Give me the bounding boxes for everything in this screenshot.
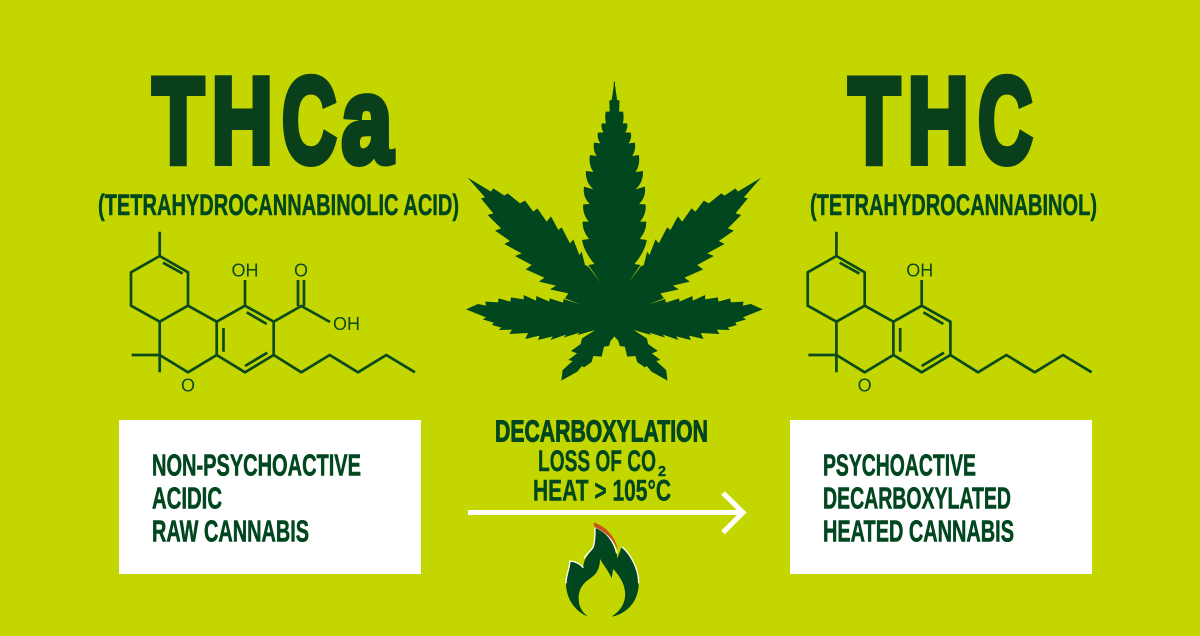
title: THCa: T xyxy=(152,52,204,188)
label: ring O: O xyxy=(181,376,195,396)
text: non-psychoactive: NON-PSYCHOACTIVE xyxy=(152,449,361,483)
text: raw cannabis: RAW CANNABIS xyxy=(152,515,309,549)
title: THCa: a xyxy=(342,52,393,188)
label: ring O: O xyxy=(858,376,872,396)
label: OH: OH xyxy=(906,260,933,280)
text: decarboxylated: DECARBOXYLATED xyxy=(823,481,1011,515)
molecule: THCa structure xyxy=(131,232,415,396)
title: THC xyxy=(848,52,1032,188)
label: acid OH: OH xyxy=(333,314,360,334)
text: heated cannabis: HEATED CANNABIS xyxy=(823,515,1014,549)
label: carbonyl O: O xyxy=(294,260,308,280)
title: THCa xyxy=(152,52,393,188)
molecule: THC structure xyxy=(808,232,1092,396)
text: heat above 105°C: HEAT > 105°C xyxy=(533,475,671,508)
text: loss of CO2: LOSS OF CO xyxy=(538,445,656,478)
label: OH: OH xyxy=(232,260,258,280)
title: THC: C xyxy=(978,52,1032,188)
icon: flame xyxy=(566,523,639,617)
panel: THCa properties xyxy=(119,420,421,574)
icon: cannabis leaf xyxy=(466,82,763,381)
arrow: decarboxylation direction xyxy=(468,493,743,532)
title: THCa: C xyxy=(282,52,336,188)
panel: THC properties xyxy=(790,420,1092,574)
title: THC: T xyxy=(848,52,900,188)
text: acidic: ACIDIC xyxy=(152,481,222,515)
title: THC: H xyxy=(908,52,969,188)
text: decarboxylation heading: DECARBOXYLATION xyxy=(495,415,708,449)
subtitle: tetrahydrocannabinolic acid: (TETRAHYDROCANNABINOLIC ACID) xyxy=(98,189,459,222)
text: psychoactive: PSYCHOACTIVE xyxy=(823,449,976,483)
text: loss of CO2 xyxy=(538,445,666,480)
text: loss of CO2: 2 xyxy=(658,463,666,480)
title: THCa: H xyxy=(212,52,273,188)
